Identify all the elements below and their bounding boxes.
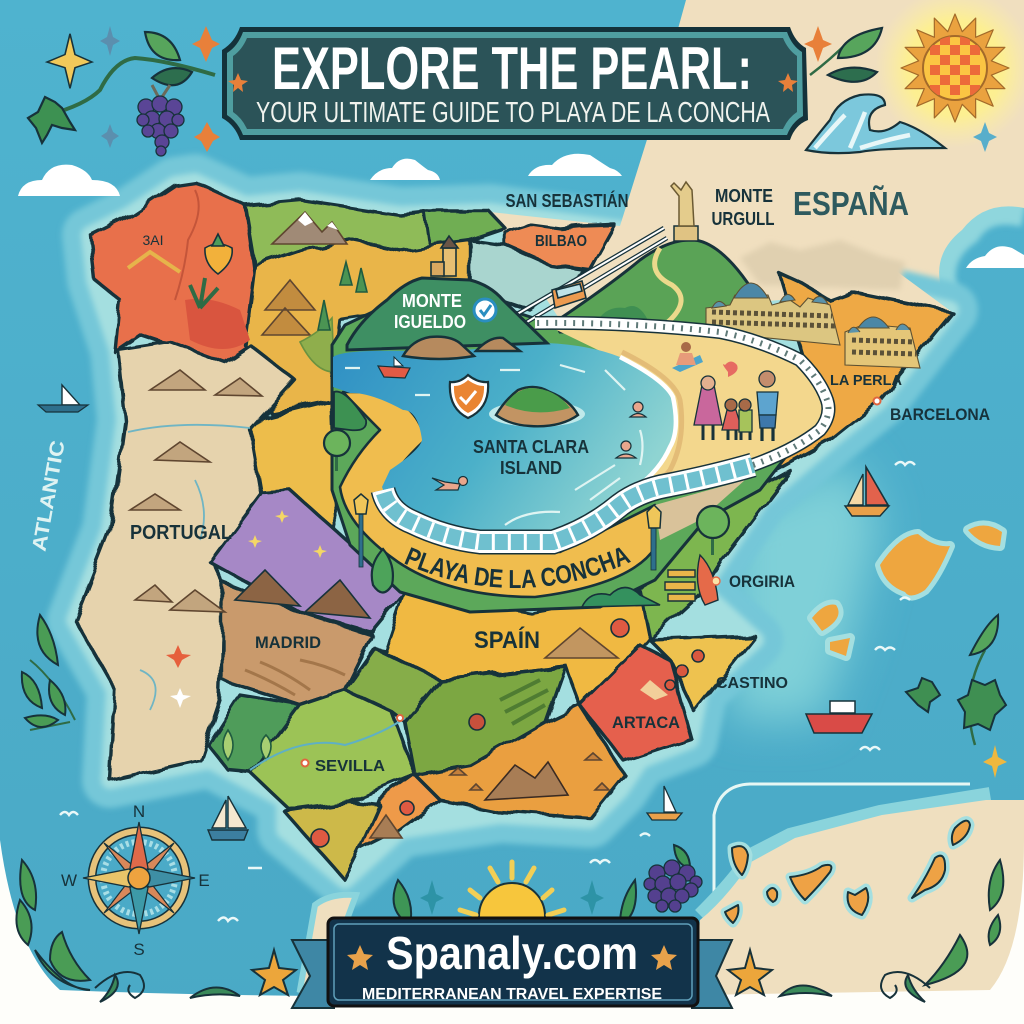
sand under promenade [655,480,745,540]
tree right [697,506,729,555]
palace east wing [845,326,920,368]
Spain centre apple [611,619,629,637]
region: Extremadura purple [210,490,405,632]
palace small domes [712,294,828,308]
tree left [324,430,350,471]
signpost orgiria [665,555,720,605]
checkmark badge [474,299,496,321]
south mountain [485,762,568,800]
label: España: ESPAÑA [793,185,909,222]
palace windows [712,312,916,354]
region: central yellow [250,400,335,530]
Asturias snow [298,212,338,230]
plaque stars [347,945,677,970]
west leaves [223,730,271,760]
leaf shrub [372,549,393,592]
compass W: W [61,871,77,890]
palace buildings [706,283,920,368]
orange sparkles [192,26,220,152]
decoration: top-right vine [804,26,997,152]
Canary islands [725,821,970,923]
purple stars [248,510,327,558]
Madrid stripes [245,660,345,695]
Portugal star [166,645,191,668]
bottom grape cluster [644,845,702,912]
girl [722,410,742,430]
label: Monte Urgull line 1: MONTE [715,186,773,206]
region: dark green west [208,695,302,772]
footer plaque [328,918,698,1006]
banner teal edge [227,32,803,135]
Spain centre mountain [545,628,618,658]
rock right [476,338,520,351]
bush left [334,392,366,430]
family group [694,371,778,441]
region: Bilbao [505,224,615,270]
vine leaf lower [152,68,192,85]
inset sand [540,322,827,535]
bottom right star [728,950,772,995]
Galicia plant [190,278,218,308]
icon: wave [806,94,945,153]
Canary islands glow [725,821,970,923]
promenade railing lower [383,465,753,542]
vine stem [48,58,215,115]
sailboat south west [208,796,248,840]
compass east [139,869,195,887]
region: Artaca [580,645,692,762]
east leaf top [970,615,998,655]
label: Monte Igueldo line 1: MONTE [402,291,462,311]
label: Santa Clara line 2: ISLAND [500,458,562,478]
hill bushes [595,306,650,325]
bottom left star [252,950,296,995]
island: Ibiza [812,605,839,631]
cloud right [528,154,622,176]
compass ring [92,831,186,925]
banner frame [222,27,808,140]
banner star right [778,73,798,92]
label: La Perla: LA PERLA [830,372,902,389]
faint mountains España [740,240,905,290]
region: Murcia yellow [650,636,755,712]
boy [739,410,752,432]
label: Santa Clara line 1: SANTA CLARA [473,437,589,457]
balearic islands [812,525,1002,656]
island 2 [790,865,831,900]
island: Menorca [968,525,1002,546]
region: green hills [345,648,440,722]
Monte Igueldo hill [347,278,547,350]
palace dome [734,283,768,298]
east wing dome [858,317,889,328]
corner vine right [780,860,1003,1002]
Málaga apple [400,801,414,815]
top title banner [222,27,808,140]
bush bottom [582,588,660,607]
compass E: E [198,871,210,890]
map regions [75,182,952,880]
Galicia inner boundary [175,190,199,300]
south orange hills [450,753,609,790]
island 4 [848,888,868,915]
label: Madrid: MADRID [255,633,321,652]
region: Málaga orange [360,775,440,850]
east gold sparkle [983,745,1007,778]
Monte Urgull hill [555,240,770,332]
compass north [130,822,148,878]
grape vine east [906,615,1007,778]
region: Castile [245,240,470,412]
hill path [655,248,681,322]
label: Castino: CASTINO [716,675,788,692]
banner star left [228,73,248,92]
Sevilla apple [311,829,329,847]
boat in bay [378,357,410,378]
shield icon [450,375,488,418]
right leaf lower [828,68,877,82]
east coast shallow water [943,212,1024,316]
promenade railing upper [535,323,828,465]
inset map frame [714,784,970,895]
clouds [18,154,1024,268]
mother [694,385,722,425]
label: Spain: SPAÍN [474,626,540,654]
east wing small domes [848,324,910,333]
funicular tracks [507,228,667,328]
balearic islands glow [812,525,1002,656]
purple mountains [235,570,370,618]
Portugal star white [170,688,191,708]
bottom sun [460,862,564,949]
compass south [130,878,148,934]
region: south orange [415,705,625,818]
island 5 [912,856,945,898]
location dots [302,398,880,766]
sailboat east [845,467,889,516]
region details [128,190,704,847]
inset promenade road [340,392,655,597]
lighthouse [431,236,458,276]
island 1 [732,846,748,875]
statue [671,182,698,241]
label: Portugal: PORTUGAL [130,522,232,544]
bay waves [345,365,642,525]
peninsula coastal glow [75,182,950,880]
right leaf top [838,28,882,58]
island 7 [725,905,738,923]
label: Monte Urgull line 2: URGULL [712,209,774,229]
Portugal mountains [130,370,262,612]
region: Catalonia [775,272,952,470]
region: Valencia green [640,470,790,640]
region: Galicia [90,182,262,362]
label: Bilbao: BILBAO [535,233,587,250]
Valencia fruit row [665,650,704,690]
compass rose [61,802,210,959]
wet sand [610,352,682,515]
lamp post left [354,494,368,567]
vineyard apple [469,714,485,730]
region: Basque bay [470,240,585,310]
Portugal rivers [128,425,250,710]
Moroccan coast [300,895,356,1000]
plaque body [328,918,698,1006]
bottom sparkles [420,880,604,915]
compass N: N [133,802,145,821]
label: Barcelona: BARCELONA [890,405,990,424]
Santa Clara island [489,387,585,427]
vine west [22,615,75,730]
island: Formentera [830,638,850,656]
heart [723,362,738,377]
vine leaf big [28,97,75,143]
label: Monte Igueldo line 2: IGUELDO [394,312,466,332]
palace main [706,295,840,345]
rock left [403,337,474,359]
statue figure [671,182,694,226]
label: Orgiria: ORGIRIA [729,572,795,591]
label: Playa de la Concha: PLAYA DE LA CONCHA [404,547,631,588]
banner body [233,38,797,129]
label: Galicia: 3AI [142,232,164,248]
gold star [47,34,92,88]
label: Atlantic: ATLANTIC [29,439,70,553]
east leaf small [906,678,940,712]
east leaf large [958,680,1006,730]
decoration: top-left vine [28,26,220,156]
subtitle: YOUR ULTIMATE GUIDE TO PLAYA DE LA CONCHA [256,97,770,129]
swimmers [432,402,646,490]
sea wave marks [60,462,915,921]
label: San Sebastián: SAN SEBASTIÁN [506,190,628,211]
island 3 [767,888,777,902]
ship east [806,701,872,733]
corner vine left [16,860,240,1002]
tagline: MEDITERRANEAN TRAVEL EXPERTISE [362,986,662,1003]
blue sparkle [973,122,997,152]
island 6 [952,821,970,845]
vineyard rows [500,680,548,724]
site name: Spanaly.com [386,927,638,979]
cloud east [966,246,1024,268]
region: Madrid [222,582,372,705]
cloud left [18,165,120,196]
label: Artaca: ARTACA [612,713,680,732]
Galicia ridge [128,252,180,272]
funicular tracks highlight [507,228,667,328]
cloud middle [370,159,440,180]
right sparkle [804,26,832,62]
strawberry leaves [212,234,224,246]
Málaga mountain [370,815,402,838]
Castile fields [300,318,334,372]
father [757,392,778,415]
trees [318,262,367,330]
east sea light patch [730,460,880,720]
mainland north-east [620,0,1024,312]
peninsula inner light glow [75,182,950,880]
icon: sun [901,14,1009,122]
funicular car [552,281,586,308]
grape cluster [137,96,184,156]
Sevilla river [250,718,405,770]
land bridge behind north coast [490,130,952,320]
region: Portugal [75,342,295,780]
vine leaf top [145,32,180,60]
lamp post right [647,505,661,570]
grape stem [152,85,170,100]
island: Mallorca [880,534,950,596]
sun glow [875,0,1024,148]
region: Cantabria [425,212,505,248]
Galicia inner patches [185,299,250,349]
white vignette bottom [0,840,1024,1024]
Castile hills [262,280,315,335]
compass S: S [133,940,145,959]
teal sparkles [100,26,120,148]
compass hub [128,867,150,889]
sailboat atlantic [38,385,88,412]
bottom leaves [394,880,636,925]
region: Asturias [245,200,430,265]
region: green vineyard [405,665,565,775]
Canary land glow [700,794,990,915]
plaque inner line [334,924,692,1000]
compass west [83,869,139,887]
sunbather [672,342,703,372]
map labels [29,185,990,775]
sailboat south centre [647,786,682,820]
Asturias mountain [272,212,347,244]
footer ribbon ends [292,940,732,1008]
Galicia strawberry [205,244,232,274]
compass diagonal points [104,843,174,913]
region: Cádiz yellow [285,802,380,880]
region: Spain centre [375,590,665,705]
Canary land [690,800,1024,1024]
inset green border [332,285,830,612]
region: Sevilla [250,690,415,810]
right vine stem [810,40,850,75]
title: EXPLORE THE PEARL: [272,35,752,102]
bay water [333,343,676,552]
label: Sevilla: SEVILLA [315,758,385,775]
statue pedestal [674,226,698,241]
foam shoreline [587,357,676,520]
Artaca mark [640,680,668,700]
